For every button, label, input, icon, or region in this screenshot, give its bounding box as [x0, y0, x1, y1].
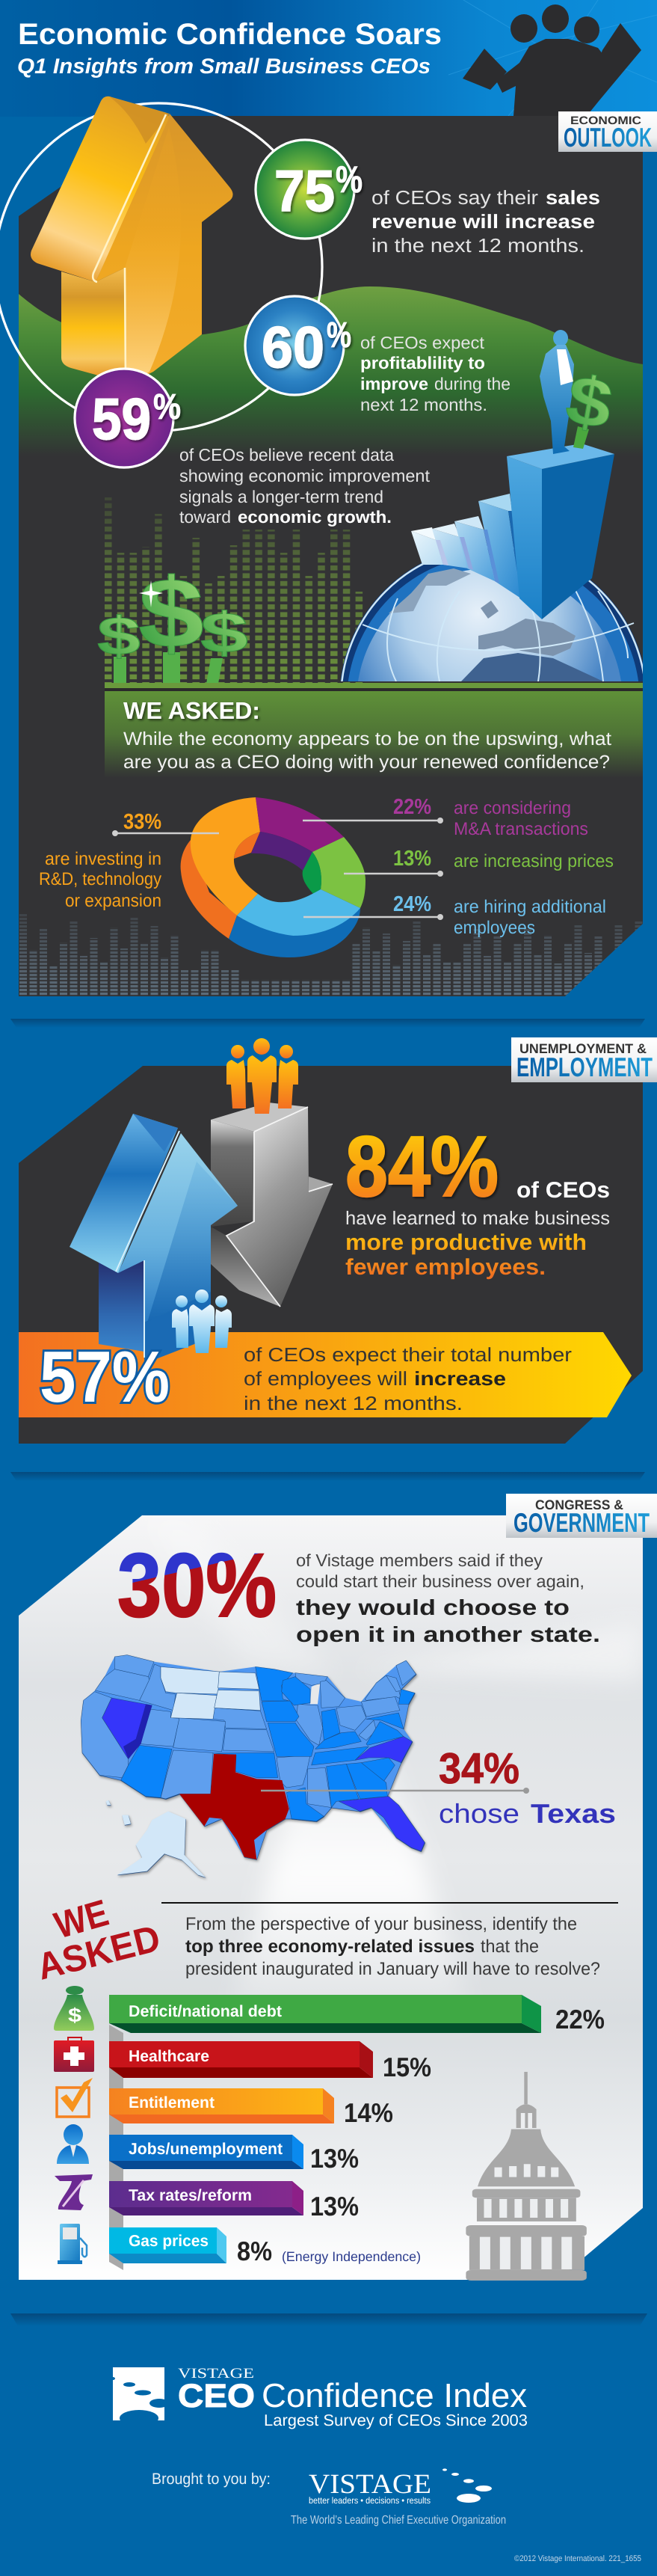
bar: gas prices	[109, 2227, 421, 2266]
text: 30% of Vistage members: of Vistage members said if they	[296, 1551, 543, 1570]
bar: tax rates: Tax rates/reform	[129, 2186, 252, 2204]
logo: Vistage CEO Confidence Index: Largest Survey of CEOs Since 2003	[264, 2411, 528, 2429]
text: 60% of CEOs	[360, 333, 511, 414]
text: question: From the perspective of your business, identify the	[185, 1914, 577, 1934]
label: 33%: R&D, technology	[39, 869, 161, 889]
text: 75% of CEOs: of CEOs say their	[371, 186, 538, 209]
badge: government	[506, 1494, 657, 1538]
text: 59% of CEOs	[179, 445, 431, 527]
label: 13%: 13%	[393, 847, 431, 871]
stat bubble: 60%	[245, 296, 351, 395]
donut chart	[181, 797, 365, 957]
silhouettes of business people	[463, 4, 641, 116]
panel: we asked question	[105, 683, 643, 778]
text: 75% of CEOs: sales	[546, 186, 600, 209]
bar: deficit: 22%	[555, 2004, 605, 2034]
banner: 57% of CEOs: increase	[414, 1367, 506, 1390]
text: 84% of CEOs: of CEOs	[516, 1178, 610, 1203]
outline ring	[0, 103, 322, 431]
text: tagline: The World’s Leading Chief Executive Organization	[291, 2514, 506, 2527]
heading: we asked: WE	[50, 1892, 113, 1947]
logo: Vistage: VISTAGE	[309, 2469, 431, 2500]
icon: three dollar signs: $	[97, 607, 141, 666]
text: 59% of CEOs: economic growth.	[238, 507, 392, 527]
text: 60% of CEOs: of CEOs expect	[360, 333, 485, 352]
text: 75% of CEOs	[371, 186, 600, 257]
stat bubble: 59%	[75, 369, 181, 467]
bar: gas prices: 8%	[237, 2236, 272, 2266]
bar: deficit	[109, 1995, 605, 2034]
header band	[0, 0, 657, 117]
stat bubble: 75%: %	[336, 159, 363, 200]
text: 60% of CEOs: improve	[360, 374, 428, 393]
icon: logo square	[111, 2367, 169, 2426]
bar: healthcare: 15%	[383, 2052, 431, 2082]
icon: three dollar signs	[97, 558, 248, 684]
text: 84% of CEOs	[345, 1119, 610, 1280]
title: Economic Confidence Soars	[18, 18, 442, 51]
banner: 57% of CEOs: in the next 12 months.	[244, 1392, 463, 1414]
bar chart graphic on globe with businessman	[411, 330, 618, 619]
bar: entitlement: 14%	[344, 2097, 393, 2128]
text: 30% of Vistage members: open it in another state.	[296, 1623, 600, 1647]
grey equalizer pattern	[19, 914, 644, 996]
label: 24%: 24%	[393, 892, 431, 916]
logo: Vistage	[309, 2468, 492, 2506]
text: copyright: ©2012 Vistage International. 221_1655	[514, 2554, 641, 2563]
banner: 57% of CEOs	[19, 1332, 632, 1417]
text: 84% of CEOs: more productive with	[345, 1230, 587, 1255]
panel: economic outlook background	[19, 116, 643, 996]
text: 75% of CEOs: in the next 12 months.	[371, 234, 584, 257]
text: 30% of Vistage members: they would choose to	[296, 1596, 570, 1620]
logo: Vistage CEO Confidence Index: CEO	[178, 2378, 255, 2414]
bar: tax rates	[109, 2181, 359, 2221]
text: 59% of CEOs: of CEOs believe recent data	[179, 445, 394, 464]
bar: gas prices: (Energy Independence)	[282, 2249, 421, 2264]
icon: money bag: $	[68, 2004, 82, 2026]
icon: medical kit	[54, 2037, 94, 2072]
bar: jobs: Jobs/unemployment	[129, 2140, 283, 2158]
bar: healthcare	[109, 2041, 431, 2082]
text: 84% of CEOs: have learned to make business	[345, 1208, 610, 1229]
icon: blue up arrow	[70, 1114, 238, 1364]
label: 24%: are hiring additional	[454, 897, 606, 917]
text: question: top three economy-related issues	[185, 1936, 475, 1957]
green equalizer pattern	[104, 497, 367, 683]
text: 75% of CEOs: revenue will increase	[371, 210, 595, 233]
panel: we asked question: While the economy appears to be on the upswing, what	[123, 729, 611, 749]
label: 22%: 22%	[393, 795, 431, 819]
label: 33%: or expansion	[65, 891, 161, 911]
banner: 57% of CEOs: of CEOs expect their total number	[244, 1343, 572, 1366]
label: 13%	[344, 847, 614, 877]
stat bubble: 60%: %	[327, 316, 351, 355]
icon: check box	[57, 2078, 93, 2117]
label: 22%	[303, 795, 588, 839]
bar: jobs: 13%	[310, 2143, 359, 2174]
heading: we asked: ASKED	[33, 1917, 164, 1988]
logo: Vistage: better leaders • decisions • results	[309, 2495, 431, 2506]
text: 59% of CEOs: signals a longer-term trend	[179, 487, 383, 506]
stat: 57%: 57%	[40, 1336, 170, 1417]
text: brought to you by: Brought to you by:	[152, 2471, 271, 2488]
logo: Vistage CEO Confidence Index	[111, 2366, 528, 2429]
text: question: president inaugurated in January will have to resolve?	[185, 1959, 600, 1979]
icon: grey down arrow	[211, 1103, 333, 1307]
icon: three dollar signs: $	[200, 601, 248, 665]
text: 30% of Vistage members	[117, 1534, 600, 1647]
icon: business person	[57, 2124, 89, 2164]
bar: entitlement	[109, 2088, 393, 2128]
section divider shadow	[10, 1472, 645, 1481]
label: 33%: 33%	[123, 810, 161, 834]
icon: three dollar signs: $	[138, 558, 204, 668]
panel: we asked question: are you as a CEO doing with your renewed confidence?	[123, 752, 610, 773]
label: 24%	[303, 892, 606, 938]
chart axis pillar	[109, 2025, 123, 2270]
label: 33%	[39, 810, 219, 911]
badge: employment: UNEMPLOYMENT &	[519, 1041, 647, 1056]
section divider shadow	[10, 2313, 647, 2326]
text: 30% of Vistage members: could start their business over again,	[296, 1571, 584, 1591]
globe	[341, 546, 643, 681]
bar: entitlement: Entitlement	[129, 2094, 215, 2112]
text: 84% of CEOs: fewer employees.	[345, 1255, 546, 1280]
subtitle: Q1 Insights from Small Business CEOs	[17, 55, 431, 79]
label: 33%: are investing in	[45, 849, 161, 869]
callout: 34% chose Texas: chose	[439, 1798, 519, 1829]
label: 24%: employees	[454, 918, 535, 938]
icon: scroll and quill	[55, 2174, 93, 2210]
panel: congress and government	[19, 1515, 643, 2280]
text: question	[185, 1914, 600, 1979]
icon: gold up arrow	[31, 96, 233, 385]
icon: gas pump	[58, 2224, 87, 2264]
callout: 34% chose Texas: Texas	[531, 1798, 616, 1829]
bar: gas prices: Gas prices	[129, 2232, 209, 2250]
text: 60% of CEOs: profitablility to	[360, 353, 485, 372]
text: 59% of CEOs: showing economic improvement	[179, 466, 431, 485]
bar: deficit: Deficit/national debt	[129, 2002, 282, 2020]
logo: Vistage CEO Confidence Index: Confidence Index	[262, 2376, 528, 2414]
badge: economic outlook: ECONOMIC	[570, 114, 641, 127]
section divider shadow	[10, 1019, 645, 1028]
banner: 57% of CEOs: of employees will	[244, 1367, 407, 1390]
badge: government: CONGRESS &	[535, 1497, 623, 1512]
stat bubble: 59%: 59	[92, 386, 151, 452]
text: question: that the	[481, 1936, 539, 1957]
stat bubble: 59%: %	[153, 387, 181, 427]
text: 30% of Vistage members: 30%	[117, 1534, 277, 1636]
label: 22%: are considering	[454, 798, 571, 818]
map: United States	[81, 1655, 425, 1877]
bar: tax rates: 13%	[310, 2191, 359, 2221]
badge: employment	[511, 1037, 657, 1082]
icon: capitol building	[466, 2072, 587, 2281]
stat bubble: 75%: 75	[274, 158, 335, 224]
stat bubble: 60%: 60	[262, 314, 324, 380]
logo: Vistage CEO Confidence Index: VISTAGE	[178, 2366, 254, 2382]
panel: we asked question: WE ASKED:	[123, 697, 260, 724]
icon: orange people	[226, 1038, 298, 1114]
text: 60% of CEOs: next 12 months.	[360, 395, 487, 414]
icon: money bag	[54, 1986, 94, 2031]
text: 84% of CEOs: 84%	[345, 1119, 499, 1215]
text: 60% of CEOs: during the	[434, 374, 511, 393]
bar: healthcare: Healthcare	[129, 2047, 209, 2065]
icon: green dollar: $	[561, 361, 618, 444]
green hill	[19, 286, 643, 464]
panel: unemployment and employment	[19, 1066, 643, 1444]
icon: blue people	[172, 1289, 232, 1353]
icon: businessman	[540, 330, 574, 454]
callout: 34% chose Texas: 34%	[439, 1744, 519, 1793]
text: 59% of CEOs: toward	[179, 507, 231, 527]
callout: 34% chose Texas	[261, 1744, 616, 1829]
label: 13%: are increasing prices	[454, 851, 614, 871]
bar: jobs	[109, 2135, 359, 2174]
stat bubble: 75%	[256, 140, 363, 239]
label: 22%: M&A transactions	[454, 819, 588, 839]
